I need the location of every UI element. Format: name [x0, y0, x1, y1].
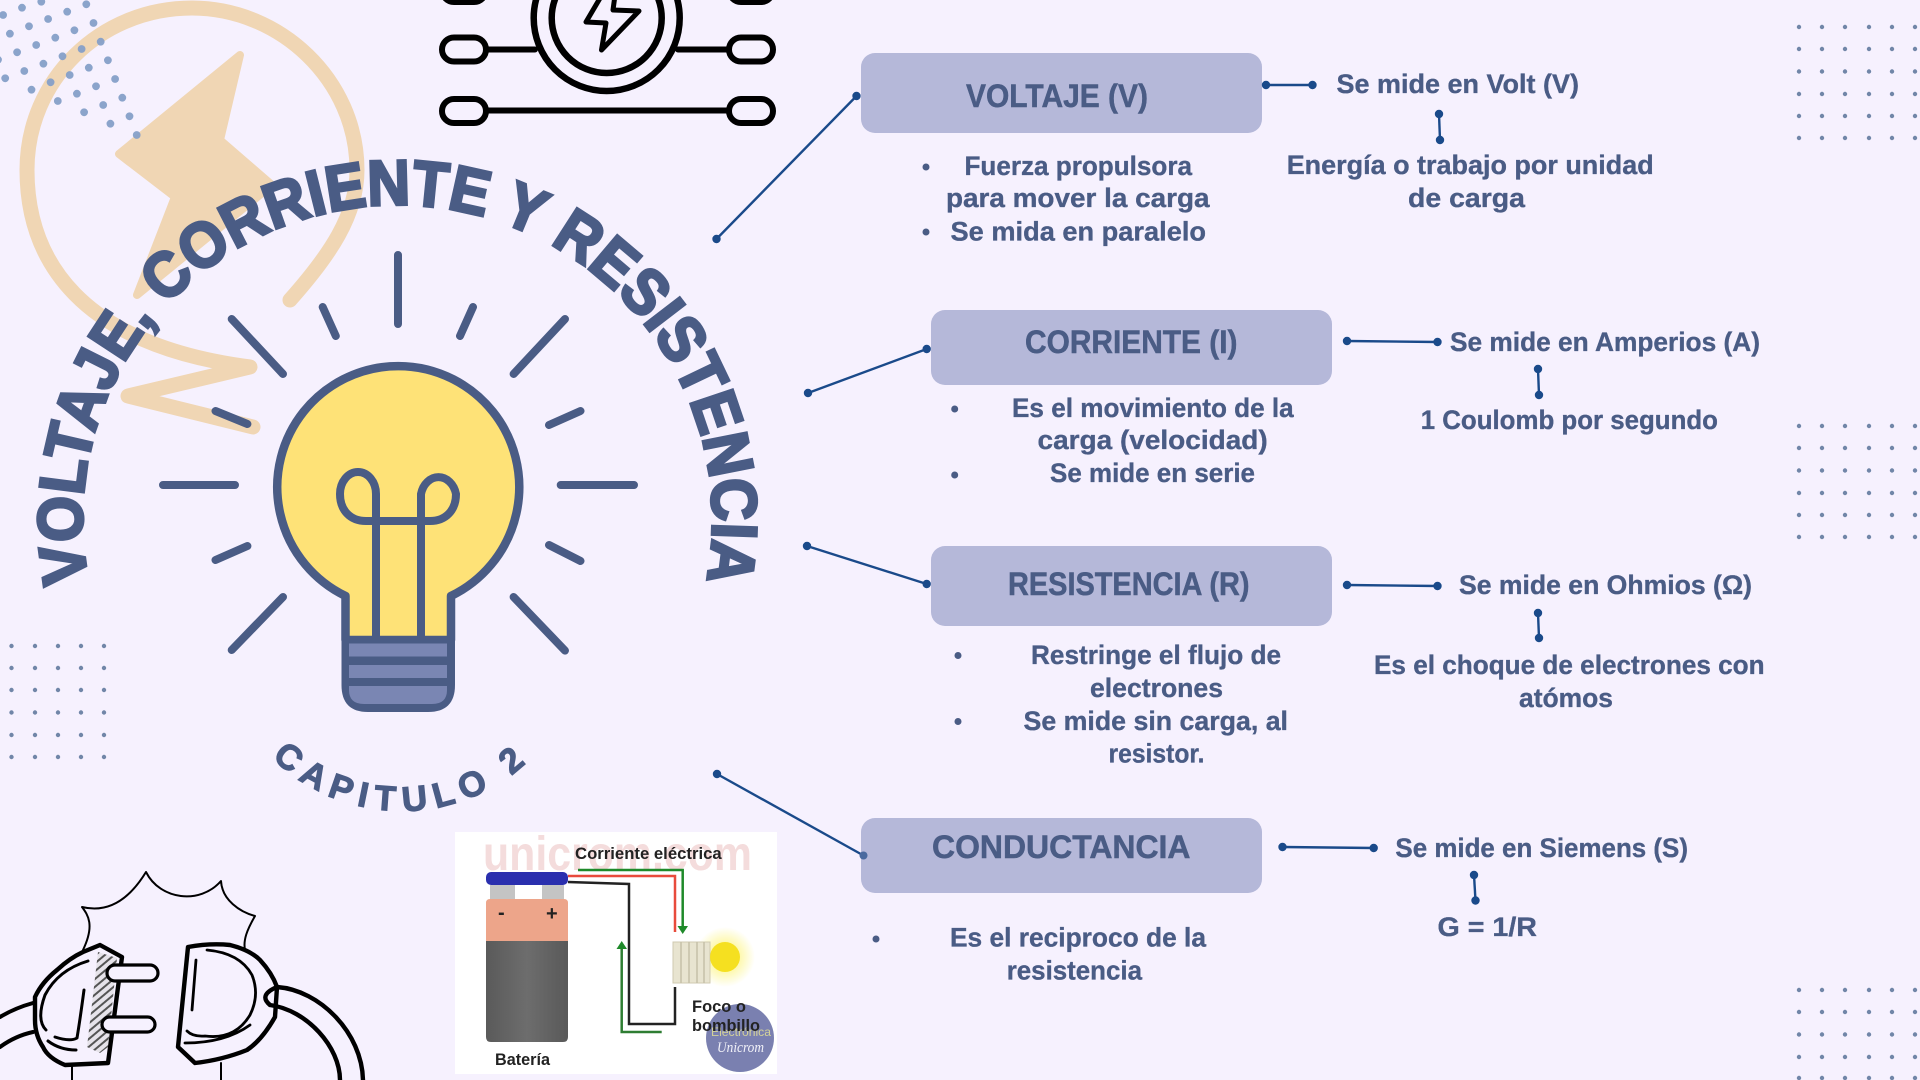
bulb rays — [163, 255, 634, 651]
watermark: unicrom.com — [483, 828, 752, 881]
heading box: voltaje — [861, 53, 1262, 133]
connector: resistencia to unit — [1344, 582, 1440, 589]
dot grid: middle right — [1797, 424, 1917, 539]
bullet list: voltaje — [922, 151, 1211, 246]
battery: - — [498, 902, 505, 924]
bullet list: corriente: carga (velocidad) — [1038, 425, 1268, 455]
panel: resistencia — [804, 543, 1765, 768]
wires — [568, 870, 688, 1032]
bullet list: corriente: Se mide en serie — [1050, 458, 1255, 488]
bullet list: resistencia: Restringe el flujo de — [1031, 640, 1281, 670]
title: VOLTAJE, CORRIENTE Y RESISTENCIA — [36, 159, 758, 589]
text: definicion resistencia — [1374, 650, 1765, 713]
bullet list: resistencia: Se mide sin carga, al — [1024, 706, 1288, 736]
text: definicion resistencia: atómos — [1519, 683, 1613, 713]
connector: corriente unit to definition — [1535, 366, 1542, 398]
panel: voltaje — [714, 53, 1654, 246]
bulb filament — [340, 472, 456, 637]
text: unidad corriente: Se mide en Amperios (A) — [1450, 327, 1760, 357]
battery: + — [546, 903, 558, 925]
badge: unicrom: Unicrom — [717, 1040, 764, 1056]
connector: resistencia to title — [804, 543, 930, 587]
battery — [486, 872, 568, 1042]
subtitle: capitulo 2: CAPITULO 2 — [276, 744, 526, 812]
bullet list: conductancia: resistencia — [1007, 956, 1143, 986]
panel: conductancia — [714, 771, 1688, 986]
text: definicion voltaje — [1287, 150, 1654, 213]
heading box: resistencia: RESISTENCIA (R) — [1008, 566, 1250, 602]
dot pattern: top left — [0, 0, 141, 139]
diagram labels — [495, 845, 723, 1069]
badge: unicrom — [706, 1004, 774, 1072]
connector: resistencia unit to definition — [1535, 610, 1542, 641]
connector: conductancia unit to formula — [1471, 872, 1478, 904]
heading box: conductancia: CONDUCTANCIA — [932, 829, 1190, 865]
bullet list: corriente — [951, 393, 1295, 488]
bulb base — [342, 637, 455, 712]
connector: conductancia to unit — [1280, 844, 1377, 851]
connector: conductancia to title — [714, 771, 868, 860]
socket right — [178, 944, 363, 1080]
text: definicion voltaje: Energía o trabajo por unidad — [1287, 150, 1654, 180]
bullet list: corriente: Es el movimiento de la — [1012, 393, 1295, 423]
diagram labels: Corriente eléctrica — [575, 845, 723, 863]
heading box: voltaje: VOLTAJE (V) — [966, 78, 1148, 114]
bullet list: resistencia: electrones — [1090, 673, 1223, 703]
image: battery circuit diagram — [455, 828, 777, 1074]
label: foco o bombillo — [692, 998, 760, 1035]
heading box: conductancia — [861, 818, 1262, 893]
connector: voltaje to title — [714, 93, 860, 242]
connector: corriente to title — [805, 346, 930, 396]
plug left — [0, 945, 158, 1065]
text: definicion voltaje: de carga — [1408, 183, 1526, 213]
bullet list: voltaje: Se mida en paralelo — [950, 216, 1206, 246]
bulb — [673, 927, 755, 987]
text: definicion resistencia: Es el choque de electrones con — [1374, 650, 1765, 680]
label: foco o bombillo: bombillo — [692, 1017, 760, 1035]
text: formula conductancia: G = 1/R — [1438, 912, 1537, 942]
bullet list: resistencia: resistor. — [1108, 738, 1204, 768]
dot grid: left — [9, 644, 106, 759]
badge: unicrom: Electrónica — [711, 1025, 771, 1039]
icon: tan lightning circle — [27, 8, 357, 427]
bullet list: conductancia — [872, 922, 1207, 986]
bullet list: voltaje: Fuerza propulsora — [964, 151, 1193, 181]
bullet list: resistencia — [954, 640, 1288, 768]
icon: circuit with lightning — [442, 0, 773, 123]
heading box: corriente: CORRIENTE (I) — [1025, 324, 1238, 360]
icon: light bulb — [163, 255, 634, 712]
dot grid: top right — [1797, 25, 1917, 140]
dot grid: bottom right — [1797, 988, 1917, 1080]
text: unidad conductancia: Se mide en Siemens (S) — [1395, 833, 1688, 863]
bullet list: voltaje: para mover la carga — [946, 183, 1211, 213]
connector: voltaje unit to definition — [1436, 111, 1443, 143]
bullet list: conductancia: Es el reciproco de la — [950, 922, 1207, 952]
text: unidad voltaje: Se mide en Volt (V) — [1336, 69, 1579, 99]
bulb glass — [277, 366, 519, 640]
diagram labels: Batería — [495, 1051, 551, 1069]
icon: plug and socket — [0, 872, 363, 1080]
label: foco o bombillo: Foco o — [692, 998, 746, 1016]
heading box: corriente — [931, 310, 1332, 385]
heading box: resistencia — [931, 546, 1332, 626]
connector: voltaje to unit — [1263, 82, 1316, 88]
panel: corriente — [805, 310, 1760, 488]
plug burst outline — [72, 872, 255, 1080]
text: unidad resistencia: Se mide en Ohmios (Ω) — [1459, 570, 1752, 600]
text: definicion corriente: 1 Coulomb por segundo — [1421, 405, 1718, 435]
connector: corriente to unit — [1344, 338, 1440, 345]
